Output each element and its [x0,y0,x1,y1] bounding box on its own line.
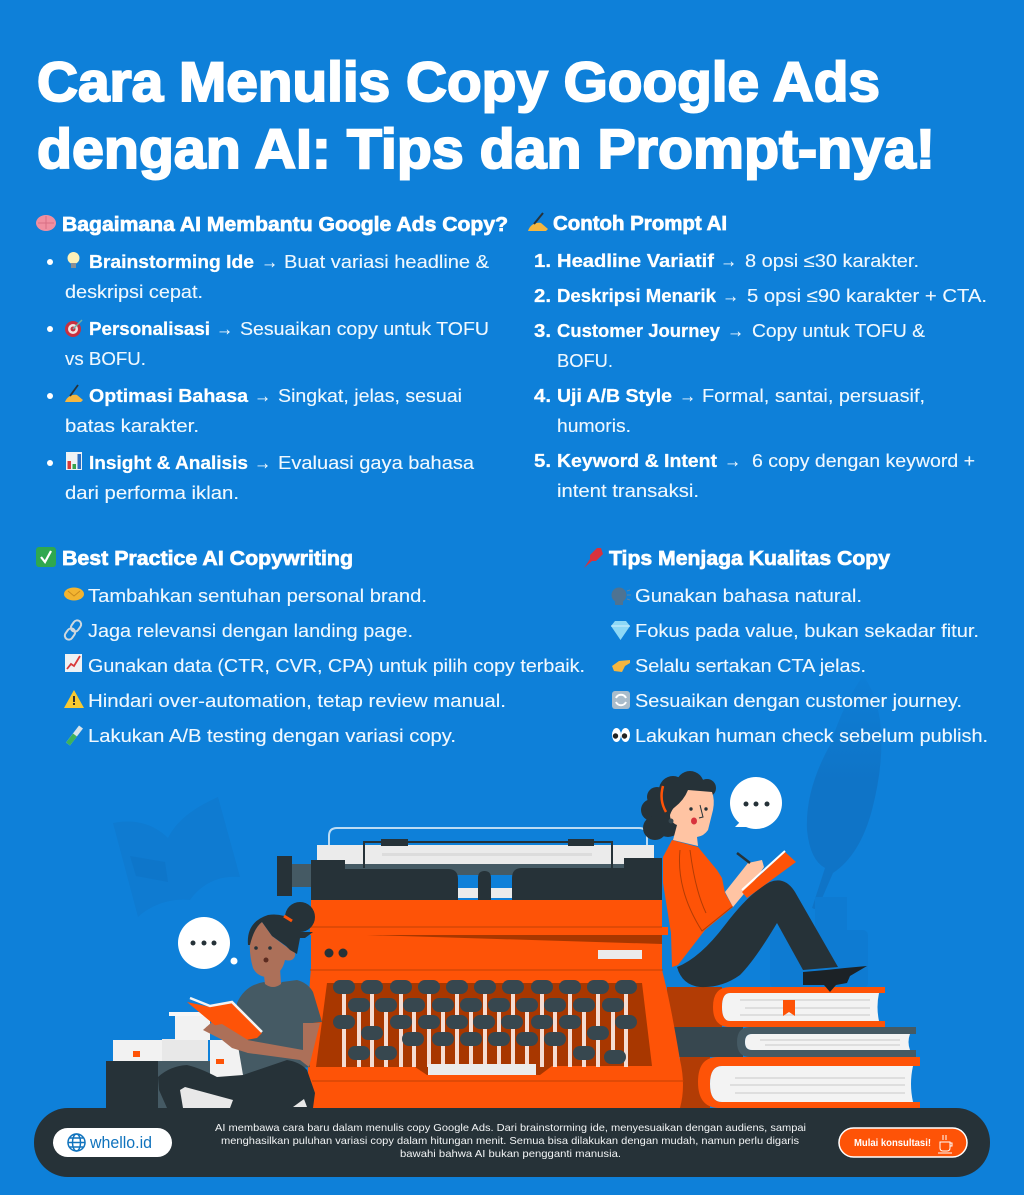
middle book [673,1027,916,1057]
heading: contoh prompt AI: Contoh Prompt AI [553,213,727,235]
prompt 3 [534,320,926,371]
title: dengan AI: Tips dan Prompt-nya! [37,117,935,180]
list item: optimasi bahasa: Optimasi Bahasa [89,385,249,406]
title [37,50,935,180]
footer text [215,1122,806,1160]
rail [364,839,612,868]
footer text: AI membawa cara baru dalam menulis copy Google Ads. Dari brainstorming ide, menyesuaikan dengan audiens, sampai [215,1122,806,1134]
illustration: left book pile [106,1012,248,1108]
prompt 3: 3. [534,320,551,341]
list item: personalisasi: → [216,318,233,339]
top book [667,987,885,1027]
prompt 4: 4. [534,385,551,406]
prompt 4: Uji A/B Style [557,385,672,406]
list item: brainstorming [47,251,490,302]
list item: insight analisis: Evaluasi gaya bahasa [278,452,475,473]
head [248,902,315,977]
icon: coffee cup [938,1135,952,1153]
illustration: typewriter [277,828,684,1108]
logo pill [53,1128,172,1157]
item: personal brand: Tambahkan sentuhan personal brand. [88,585,427,606]
paper bail [329,828,647,850]
heading: best practice: Best Practice AI Copywriting [62,548,353,570]
background: faded open book [113,797,240,917]
item: data: Gunakan data (CTR, CVR, CPA) untuk pilih copy terbaik. [88,655,585,676]
item: A/B testing: Lakukan A/B testing dengan variasi copy. [88,725,456,746]
item: landing page: Jaga relevansi dengan landing page. [88,620,413,641]
carriage [311,858,662,900]
background: faded feather and ink bottle [770,676,881,988]
shirt [237,980,322,1075]
prompt 5: 5. [534,450,551,471]
list item: insight analisis [47,452,475,503]
list item: brainstorming: Buat variasi headline & [284,251,490,272]
item: over-automation: Hindari over-automation, tetap review manual. [88,690,506,711]
list item: personalisasi: Personalisasi [89,318,210,339]
panel: contoh prompt AI [528,213,987,501]
illustration: stacked books right [667,987,920,1108]
notebook [742,851,796,898]
prompt 2: → [722,285,739,306]
hand [206,1024,248,1053]
list item: brainstorming: deskripsi cepat. [65,281,203,302]
list item: personalisasi [47,318,489,369]
prompt 1 [534,250,919,271]
book [187,998,262,1042]
keys [333,980,637,1064]
trousers [677,880,838,987]
prompt 5: → [724,450,741,471]
item: human check: Lakukan human check sebelum publish. [635,725,988,746]
list item: optimasi bahasa: Singkat, jelas, sesuai [278,385,462,406]
panel: bagaimana AI membantu [36,214,508,503]
item: CTA: Selalu sertakan CTA jelas. [635,655,866,676]
icon: globe [68,1134,85,1151]
sweater [663,840,733,967]
panel: tips menjaga kualitas [584,548,988,746]
prompt 5: 6 copy dengan keyword + [752,450,975,471]
illustration: woman reading [158,902,322,1108]
list item: personalisasi: vs BOFU. [65,348,146,369]
platen knob [277,856,314,896]
item: customer journey: Sesuaikan dengan customer journey. [635,690,962,711]
item: value: Fokus pada value, bukan sekadar fitur. [635,620,979,641]
pen [737,853,750,863]
list item: brainstorming: Brainstorming Ide [89,251,254,272]
prompt 3: Customer Journey [557,320,721,341]
prompt 4: humoris. [557,415,631,436]
panel: best practice [36,547,585,746]
list item: insight analisis: Insight & Analisis [89,452,248,473]
footer text: bawahi bahwa AI bukan pengganti manusia. [400,1148,621,1160]
hair [641,771,716,840]
prompt 1: → [720,250,737,271]
space bar [428,1064,536,1075]
prompt 4 [534,385,925,436]
logo pill: whello.id [89,1133,152,1152]
prompt 2: Deskripsi Menarik [557,285,717,306]
item: bahasa natural: Gunakan bahasa natural. [635,585,862,606]
heading: bagaimana AI membantu: Bagaimana AI Membantu Google Ads Copy? [62,214,508,236]
prompt 3: Copy untuk TOFU & [752,320,926,341]
socks [180,1087,233,1108]
CTA button: Mulai konsultasi! [854,1137,931,1149]
title: Cara Menulis Copy Google Ads [37,50,880,113]
key stems [344,990,626,1067]
footer bar [34,1108,990,1177]
list item: optimasi bahasa: batas karakter. [65,415,199,436]
CTA button [839,1128,967,1157]
prompt 3: → [727,320,744,341]
list item: optimasi bahasa [47,385,462,436]
body [308,900,683,1108]
thought bubble [178,917,238,969]
heading: tips menjaga kualitas: Tips Menjaga Kualitas Copy [609,548,891,570]
list item: insight analisis: → [254,452,271,473]
prompt 5: intent transaksi. [557,480,699,501]
speech bubble [730,777,782,829]
prompt 2: 5 opsi ≤90 karakter + CTA. [747,285,987,306]
prompt 1: 1. [534,250,551,271]
footer text: menghasilkan puluhan variasi copy dalam hitungan menit. Semua bisa dilakukan dengan mudah, namun perlu digaris [221,1135,799,1147]
illustration: woman writing on books [641,771,867,992]
key well [316,983,652,1075]
list item: personalisasi: Sesuaikan copy untuk TOFU [240,318,489,339]
bottom book [680,1057,920,1108]
paper roll [317,845,654,865]
prompt 2 [534,285,987,306]
list item: optimasi bahasa: → [254,385,271,406]
face [668,790,714,846]
prompt 5: Keyword & Intent [557,450,717,471]
prompt 1: 8 opsi ≤30 karakter. [745,250,919,271]
prompt 3: BOFU. [557,350,613,371]
list item: brainstorming: → [261,251,278,272]
label plate [598,950,642,959]
legs [158,1060,315,1108]
prompt 2: 2. [534,285,551,306]
dots [324,948,348,958]
list item: insight analisis: dari performa iklan. [65,482,239,503]
prompt 1: Headline Variatif [557,250,715,271]
arm [203,1022,320,1067]
arm [725,860,764,907]
prompt 4: → [679,385,696,406]
shoe [803,966,867,992]
neck [263,968,281,987]
prompt 5 [534,450,975,501]
prompt 4: Formal, santai, persuasif, [702,385,925,406]
